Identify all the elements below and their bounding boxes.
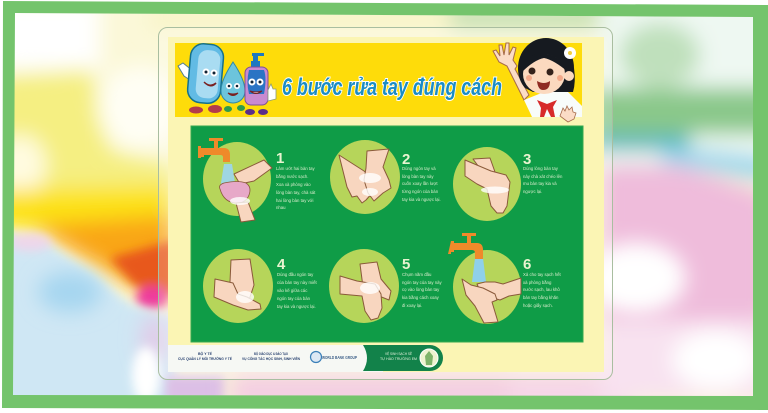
- step 5: [329, 249, 443, 323]
- hair: [518, 38, 575, 92]
- title: 6 bước rửa tay đúng cách: [282, 74, 502, 101]
- step 6 illustration: tap and hands: [448, 233, 521, 324]
- partner: ministry of education: [242, 351, 300, 361]
- step 1 text: bằng nước sạch.: [276, 174, 308, 179]
- step 2: [330, 140, 441, 214]
- step 1 text: hai lòng bàn tay với: [276, 198, 314, 203]
- partner: world bank logo: WORLD BANK GROUP: [322, 355, 357, 360]
- campaign green badge: TỰ HÀO TRƯỜNG EM: [380, 356, 417, 361]
- mascot: soap: [178, 43, 225, 114]
- step 4 text: của bàn tay này miết: [277, 280, 317, 285]
- step 6: [448, 233, 562, 324]
- step 4 text: ngón tay của bàn: [277, 296, 311, 301]
- step 4 text: tay kia và ngược lại.: [277, 304, 316, 309]
- step 2 text: Dùng ngón tay và: [402, 166, 436, 171]
- footer logos: [168, 345, 443, 372]
- step 5 text: Chụm năm đầu: [402, 272, 432, 277]
- step 2 number: 2: [402, 151, 410, 168]
- step 3 text: Dùng lòng bàn tay: [523, 166, 559, 171]
- step 3 text: mu bàn tay kia và: [523, 181, 557, 186]
- header banner: [175, 38, 582, 122]
- step 5 number: 5: [402, 256, 410, 273]
- step 1 illustration: tap and hands: [198, 138, 272, 222]
- partner: ministry of health: BỘ Y TẾ: [198, 351, 212, 356]
- step 2 text: tay kia và ngược lại.: [402, 197, 441, 202]
- step 2 text: từng ngón của bàn: [402, 189, 439, 194]
- step 6 text: bàn tay bằng khăn: [523, 295, 559, 300]
- campaign green badge: VỆ SINH SẠCH SẼ: [385, 351, 412, 356]
- step 6 text: xà phòng bằng: [523, 280, 552, 285]
- arm and waving hand: [493, 43, 529, 100]
- mascot: soap bottle: [245, 53, 276, 115]
- face: [523, 54, 565, 94]
- step 4 text: vào kẽ giữa các: [277, 288, 308, 293]
- step 6 text: Xả cho tay sạch hết: [523, 272, 562, 277]
- girl character: [493, 38, 582, 122]
- step 6 text: nước sạch, lau khô: [523, 287, 560, 292]
- step 1 number: 1: [276, 150, 284, 167]
- partner: ministry of health: [178, 351, 232, 361]
- step 1 text: lòng bàn tay, chà sát: [276, 190, 316, 195]
- step 2 illustration: hands: [330, 140, 400, 214]
- step 3: [453, 147, 563, 221]
- top strip and bottom strip behind poster: [154, 14, 753, 396]
- step 3 text: ngược lại.: [523, 189, 542, 194]
- partner: ministry of education: BỘ GIÁO DỤC & ĐÀO TẠO: [254, 351, 288, 356]
- poster: [158, 28, 612, 380]
- shirt: [524, 92, 582, 117]
- step 6 text: hoặc giấy sạch.: [523, 303, 553, 308]
- step 5 text: đi xoay lại.: [402, 303, 422, 308]
- step 6 number: 6: [523, 256, 531, 273]
- poster outer glass border: [158, 28, 612, 380]
- step 2 text: cuốn xoay lần lượt: [402, 181, 438, 186]
- campaign green badge: [363, 345, 443, 371]
- step 5 text: kia bằng cách xoay: [402, 295, 440, 300]
- step 3 text: này chà xát chéo lên: [523, 174, 563, 179]
- step 4: [203, 249, 317, 323]
- partner: world bank logo: [310, 352, 357, 362]
- poster cream background: [168, 37, 604, 372]
- step 4 illustration: hands: [203, 249, 273, 323]
- step 5 text: ngón tay của tay này: [402, 280, 443, 285]
- partner: ministry of education: VỤ CÔNG TÁC HỌC SINH, SINH VIÊN: [242, 356, 300, 361]
- step 5 illustration: hands: [329, 249, 399, 323]
- footer white strip: [168, 345, 383, 372]
- step 2 text: lòng bàn tay này: [402, 174, 434, 179]
- step 4 text: Dùng đầu ngón tay: [277, 272, 314, 277]
- step 3 illustration: hands: [453, 147, 521, 221]
- step 5 text: cọ vào lòng bàn tay: [402, 287, 440, 292]
- step 1 text: Làm ướt hai bàn tay: [276, 166, 316, 171]
- green steps panel: [191, 126, 583, 342]
- step 1 text: Xoa xà phòng vào: [276, 182, 311, 187]
- step 3 number: 3: [523, 151, 531, 168]
- step 1: [198, 138, 316, 222]
- mascot: water drop: [221, 62, 245, 112]
- step 1 text: nhau: [276, 205, 286, 210]
- step 4 number: 4: [277, 256, 286, 273]
- partner: ministry of health: CỤC QUẢN LÝ MÔI TRƯỜNG Y TẾ: [178, 356, 232, 361]
